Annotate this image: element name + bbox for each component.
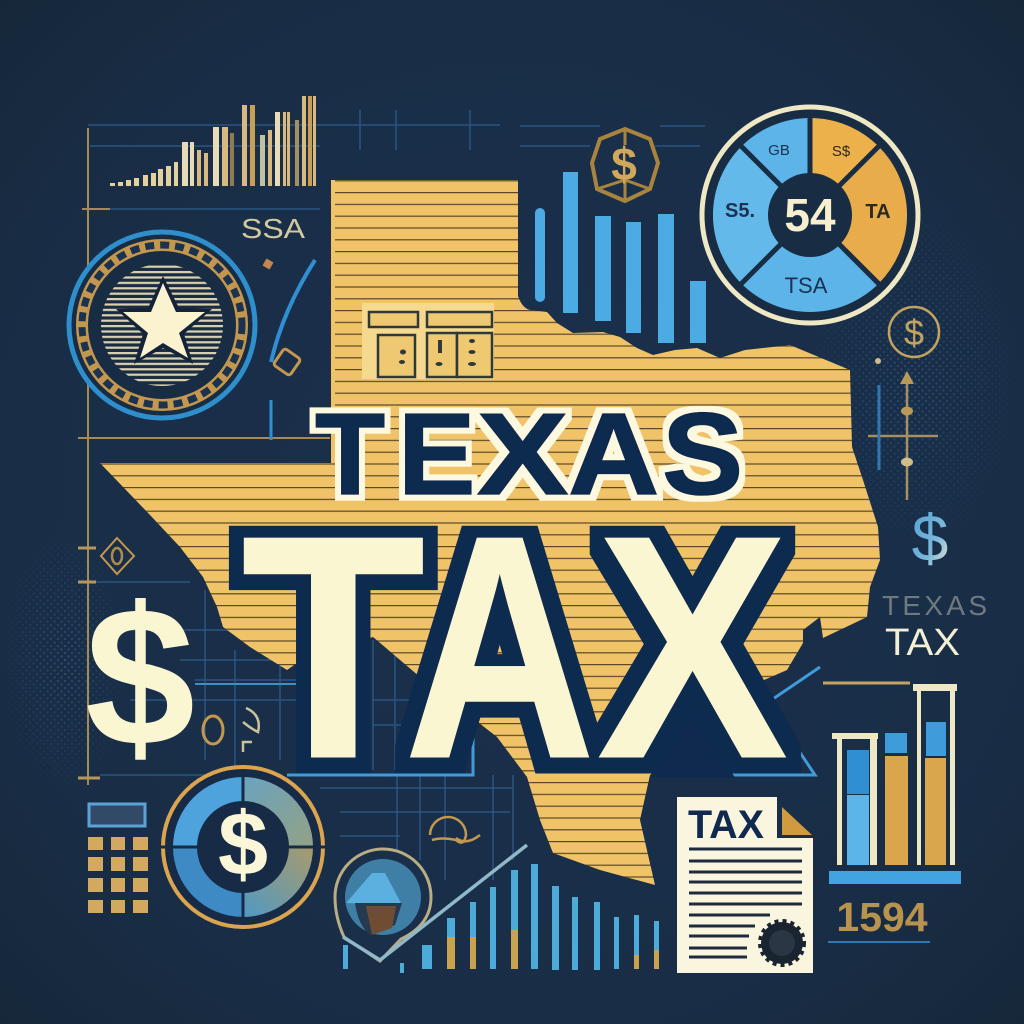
small ornaments xyxy=(101,538,480,843)
side label: Texas Tax xyxy=(882,590,987,664)
pie chart: S$ xyxy=(832,143,851,160)
globe icon xyxy=(335,849,431,961)
building icons on map xyxy=(362,303,494,379)
tax document: TAX xyxy=(688,803,764,847)
blue bars top centre xyxy=(535,172,706,343)
dollar coin bottom-left: $ xyxy=(218,795,268,895)
pie chart: GB xyxy=(768,142,790,159)
small marks beside seal xyxy=(263,259,315,440)
star seal xyxy=(69,232,255,418)
panhandle edge band xyxy=(331,180,335,463)
pie chart: S5. xyxy=(725,200,755,222)
right dollar coin: $ xyxy=(904,312,924,353)
title: Tax: A xyxy=(404,470,596,825)
title: Texas: X xyxy=(477,389,568,519)
title: Texas: E xyxy=(398,389,475,519)
number 1594: 1594 xyxy=(836,894,928,940)
background grid lines xyxy=(78,110,930,942)
tax document xyxy=(677,797,813,973)
pie chart: TSA xyxy=(785,273,828,298)
dollar coin bottom-left xyxy=(160,767,325,927)
pie chart: TA xyxy=(865,201,891,223)
calculator icon xyxy=(88,804,148,913)
large dollar sign: $ xyxy=(85,566,195,787)
title: Texas: T xyxy=(315,389,385,519)
title: Texas: A xyxy=(568,389,659,519)
label SSA: SSA xyxy=(241,213,305,244)
notch shadow between A and X xyxy=(650,700,735,778)
title: Tax: T xyxy=(241,469,426,825)
pie chart xyxy=(702,107,918,323)
side label: Texas Tax: TAX xyxy=(885,622,960,664)
pie chart: 54 xyxy=(784,189,836,241)
title: Tax xyxy=(241,469,789,825)
top coin icon: $ xyxy=(611,138,637,190)
bottom trend chart xyxy=(343,845,659,973)
top-left bar chart xyxy=(110,96,316,186)
title: Texas: S xyxy=(662,390,743,519)
top coin icon xyxy=(592,129,658,201)
map of Texas xyxy=(100,180,880,885)
side label: Texas Tax: TEXAS xyxy=(882,590,987,621)
right dollar sign: $ xyxy=(912,501,948,575)
right dollar coin xyxy=(889,307,939,357)
title: Texas xyxy=(315,389,743,519)
title: Tax: X xyxy=(597,470,789,825)
top bar chart ornament xyxy=(823,682,910,684)
right axis graphic xyxy=(868,358,938,500)
right bar chart xyxy=(829,684,961,884)
